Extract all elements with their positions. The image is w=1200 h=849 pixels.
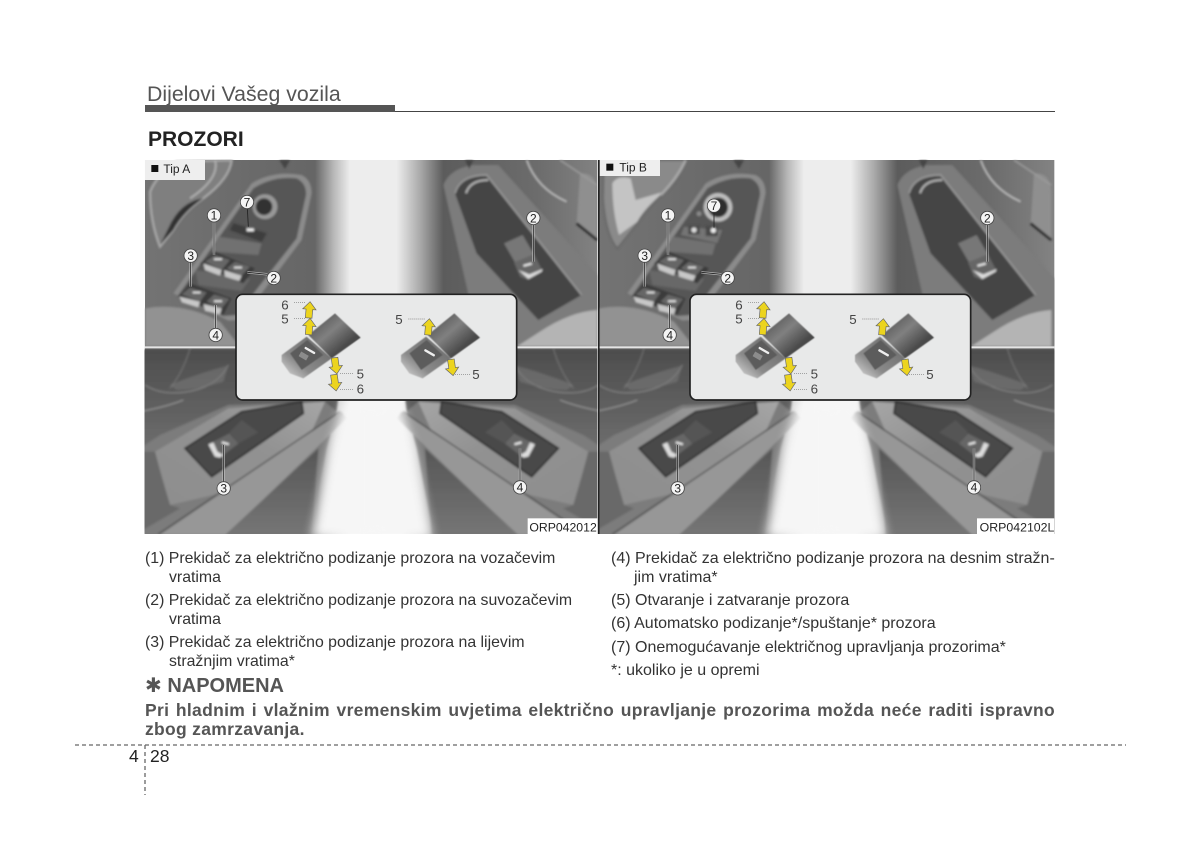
inset numbers B <box>735 297 934 397</box>
7 callout A <box>240 195 254 227</box>
inset numbers B: 6 <box>735 297 743 312</box>
tag: Tip B: Tip B <box>619 161 647 175</box>
callout numbers A: 4 <box>212 328 219 342</box>
inset: switch operation B <box>690 294 971 400</box>
legend item 1: (1) Prekidač za električno podizanje prozora na vozačevim <box>145 550 555 567</box>
legend: right column <box>611 550 1055 679</box>
legend item 1 <box>145 550 555 586</box>
callout numbers B: 4 <box>666 328 673 342</box>
page number: 28 <box>150 746 169 766</box>
code: ORP042012: ORP042012 <box>529 521 597 535</box>
callout numbers A: 2 <box>270 271 277 285</box>
footnote: *: ukoliko je u opremi <box>611 662 760 679</box>
inset numbers A: 5 <box>357 366 364 381</box>
inset numbers B: 5 <box>849 312 857 327</box>
callout numbers A <box>187 195 537 496</box>
illustrations <box>144 160 1054 534</box>
callout numbers B: 3 <box>641 249 648 263</box>
7 callout B <box>707 199 721 228</box>
tag: Tip A <box>145 160 205 180</box>
divider between panels <box>598 160 600 534</box>
callout numbers B: 2 <box>724 271 731 285</box>
legend item 7: (7) Onemogućavanje električnog upravljanja prozorima* <box>611 639 1006 656</box>
callouts B <box>638 209 994 495</box>
legend item 2: (2) Prekidač za električno podizanje prozora na suvozačevim <box>145 592 572 609</box>
page number <box>129 746 169 766</box>
panel: Tip A window switches <box>140 155 607 538</box>
legend item 2 <box>145 592 572 628</box>
inset numbers B: 6 <box>811 382 818 397</box>
page number: 4 <box>129 746 139 766</box>
header rule <box>395 111 1055 112</box>
legend item 6: (6) Automatsko podizanje*/spuštanje* prozora <box>611 615 936 632</box>
inset numbers A: 5 <box>395 312 403 327</box>
inset numbers A: 6 <box>281 297 289 312</box>
inset numbers A <box>281 297 480 397</box>
legend item 3 <box>145 634 525 670</box>
inset numbers B: 5 <box>926 367 934 382</box>
tag: Tip B <box>600 160 660 176</box>
note heading: ✱ NAPOMENA <box>145 673 284 697</box>
legend item 4: (4) Prekidač za električno podizanje prozora na desnim stražn- <box>611 550 1055 567</box>
callout numbers A: 3 <box>187 249 194 263</box>
legend item 4 <box>611 550 1055 586</box>
callout numbers B: 7 <box>711 199 718 213</box>
inset numbers A: 5 <box>472 367 480 382</box>
note <box>145 673 1055 739</box>
section title: Dijelovi Vašeg vozila <box>147 82 341 106</box>
legend item 3: stražnjim vratima* <box>169 652 295 670</box>
callout numbers A: 3 <box>220 482 227 496</box>
legend item 4: jim vratima* <box>634 568 718 586</box>
inset numbers B: 5 <box>811 366 818 381</box>
legend item 5: (5) Otvaranje i zatvaranje prozora <box>611 592 849 609</box>
code: ORP042102L: ORP042102L <box>980 521 1055 535</box>
inset numbers A: 5 <box>281 312 289 327</box>
section header <box>145 82 1055 112</box>
inset: switch operation A <box>236 294 517 400</box>
callout numbers B: 1 <box>665 209 672 223</box>
legend item 2: vratima <box>169 610 221 628</box>
tag: Tip A: Tip A <box>163 162 190 176</box>
callouts A <box>184 209 540 495</box>
callout numbers B: 3 <box>674 482 681 496</box>
door pull handle A <box>150 160 278 247</box>
callout numbers A: 7 <box>244 195 251 209</box>
inset numbers A: 6 <box>357 382 364 397</box>
callout numbers B: 2 <box>984 211 991 225</box>
inset numbers B: 5 <box>735 312 743 327</box>
heading: PROZORI <box>148 128 244 151</box>
note text: Pri hladnim i vlažnim vremenskim uvjetima električno upravljanje prozorima možda neće raditi ispravno zbog zamrzavanja. <box>145 700 1055 739</box>
panel: Tip B window switches <box>594 155 1061 538</box>
legend: left column <box>145 550 572 670</box>
header bar <box>145 105 395 112</box>
callout numbers A: 1 <box>211 209 218 223</box>
callout numbers B: 4 <box>971 481 978 495</box>
callout numbers B <box>641 199 991 496</box>
legend item 3: (3) Prekidač za električno podizanje prozora na lijevim <box>145 634 525 651</box>
callout numbers A: 4 <box>517 481 524 495</box>
callout numbers A: 2 <box>530 211 537 225</box>
door pull handle B <box>603 160 733 248</box>
legend item 1: vratima <box>169 568 221 586</box>
